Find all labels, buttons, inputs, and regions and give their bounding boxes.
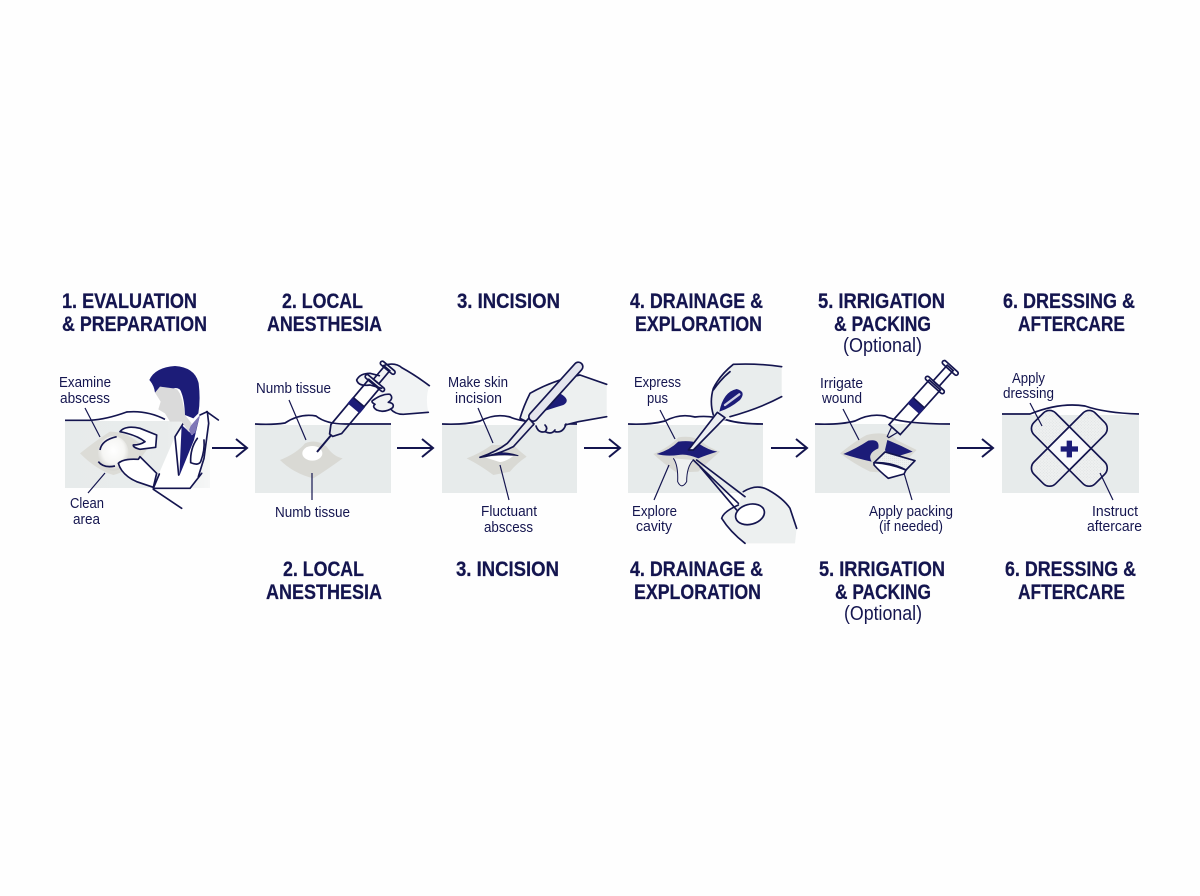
label: irrigate wound: wound [821, 390, 862, 407]
tissue block [1002, 400, 1139, 493]
panel: step 3 incision [442, 290, 607, 536]
label: express pus: pus [647, 390, 668, 407]
heading: step 4 [630, 290, 763, 336]
illustration: doctor examining abscess [65, 366, 218, 508]
arrow: step 2 to 3 [397, 439, 433, 457]
icon: gauze packing [874, 452, 915, 478]
label: explore cavity: cavity [636, 518, 672, 535]
label: instruct aftercare: Instruct [1092, 503, 1139, 520]
label: numb tissue top [256, 380, 331, 440]
heading: repeated step 5 [819, 558, 945, 625]
heading: step 5: 5. IRRIGATION [818, 290, 945, 313]
label: express pus [634, 374, 681, 439]
label: clean area [70, 473, 105, 528]
heading: repeated step 4: EXPLORATION [634, 581, 761, 604]
heading: step 2 [267, 290, 382, 336]
label: make skin incision: incision [455, 390, 502, 407]
icon: cross bandage [1028, 407, 1111, 490]
heading: step 6: 6. DRESSING & [1003, 290, 1135, 313]
heading: step 2: 2. LOCAL [282, 290, 363, 313]
label: examine abscess: Examine [59, 374, 111, 391]
arrow: step 4 to 5 [771, 439, 807, 457]
panel: step 4 drainage and exploration [628, 290, 797, 543]
heading: step 1: 1. EVALUATION [62, 290, 197, 313]
icon: fingers gripping syringe [372, 394, 393, 411]
repeated heading row [266, 558, 1136, 625]
heading: step 1: & PREPARATION [62, 313, 207, 336]
label: examine abscess: abscess [60, 390, 110, 407]
heading: step 2: ANESTHESIA [267, 313, 382, 336]
label: make skin incision: Make skin [448, 374, 508, 391]
icon: hand holding scalpel [480, 367, 607, 457]
heading: step 4: EXPLORATION [635, 313, 762, 336]
label: clean area: area [73, 511, 101, 528]
tissue block with open wound [628, 416, 763, 493]
label: express pus: Express [634, 374, 681, 391]
tissue block with incision [442, 416, 577, 493]
label: fluctuant abscess: Fluctuant [481, 503, 538, 520]
tissue block with skin line and numbed area [255, 415, 391, 493]
heading: repeated step 6: 6. DRESSING & [1005, 558, 1136, 581]
label: numb tissue bottom: Numb tissue [275, 504, 350, 521]
panel: step 6 dressing and aftercare [1002, 290, 1142, 535]
heading: repeated step 6: AFTERCARE [1018, 581, 1125, 604]
heading: repeated step 5: 5. IRRIGATION [819, 558, 945, 581]
label: irrigate wound: Irrigate [820, 375, 863, 392]
heading: repeated step 2: ANESTHESIA [266, 581, 382, 604]
label: examine abscess [59, 374, 111, 437]
tissue block with wound [815, 415, 950, 493]
icon: hand behind syringe [357, 364, 429, 414]
icon: syringe injecting [308, 358, 398, 460]
heading: step 5 [818, 290, 945, 357]
heading: repeated step 6 [1005, 558, 1136, 604]
heading: repeated step 2 [266, 558, 382, 604]
label: apply dressing: dressing [1003, 385, 1054, 402]
panel: step 2 local anesthesia [255, 290, 429, 521]
label: irrigate wound [820, 375, 863, 440]
heading: repeated step 4 [630, 558, 763, 604]
label: apply packing: Apply packing [869, 503, 953, 520]
label: instruct aftercare [1087, 473, 1142, 535]
icon: syringe irrigating [879, 358, 960, 445]
label: explore cavity: Explore [632, 503, 677, 520]
label: clean area: Clean [70, 495, 104, 512]
label: apply packing: (if needed) [879, 518, 943, 535]
arrow: step 3 to 4 [584, 439, 620, 457]
heading: step 5: & PACKING [834, 313, 931, 336]
heading: repeated step 5: & PACKING [835, 581, 931, 604]
label: fluctuant abscess: abscess [484, 519, 533, 536]
label: apply packing [869, 473, 953, 535]
label: make skin incision [448, 374, 508, 443]
heading: step 6: AFTERCARE [1018, 313, 1125, 336]
heading: step 1 [62, 290, 207, 336]
label: instruct aftercare: aftercare [1087, 518, 1142, 535]
label: numb tissue bottom [275, 473, 350, 521]
tissue block: step 1 [65, 421, 210, 488]
panel: step 1 evaluation and preparation [59, 290, 218, 528]
label: numb tissue top: Numb tissue [256, 380, 331, 397]
icon: hand with forceps [693, 460, 797, 543]
heading: step 3: 3. INCISION [457, 290, 560, 313]
label: fluctuant abscess [481, 465, 538, 536]
heading: repeated step 5: (Optional) [844, 603, 922, 625]
heading: repeated step 3: 3. INCISION [456, 558, 559, 581]
arrow: step 1 to 2 [212, 439, 247, 457]
heading: step 6 [1003, 290, 1135, 336]
label: apply dressing [1003, 370, 1054, 426]
label: apply dressing: Apply [1012, 370, 1045, 387]
heading: step 4: 4. DRAINAGE & [630, 290, 763, 313]
heading: step 5: (Optional) [843, 335, 922, 357]
panel: step 5 irrigation and packing [815, 290, 960, 535]
label: explore cavity [632, 465, 677, 535]
heading: repeated step 4: 4. DRAINAGE & [630, 558, 763, 581]
icon: hand with swab [688, 364, 782, 450]
heading: repeated step 2: 2. LOCAL [283, 558, 364, 581]
arrow: step 5 to 6 [957, 439, 993, 457]
